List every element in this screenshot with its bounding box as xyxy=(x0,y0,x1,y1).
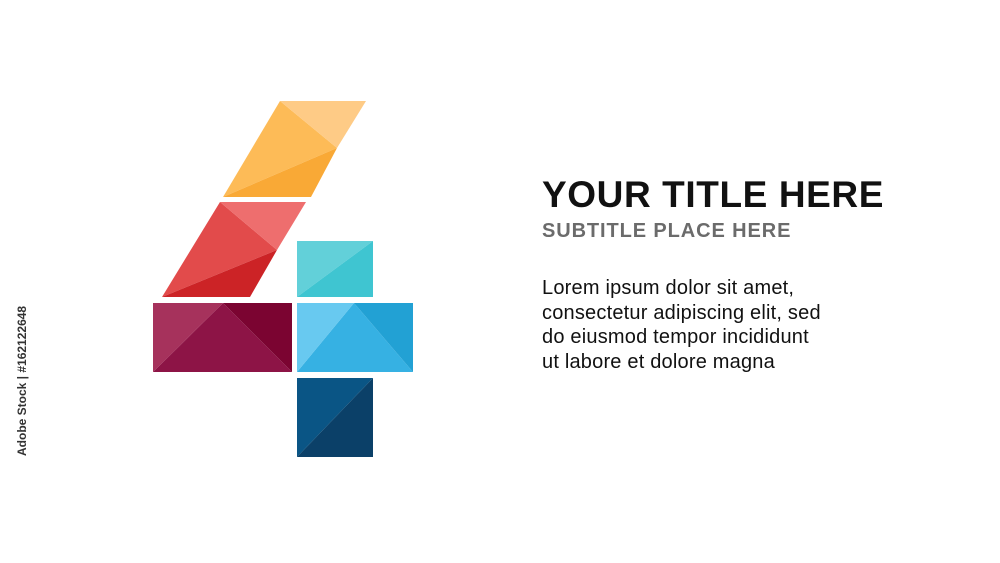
watermark side text: Adobe Stock | #162122648 xyxy=(15,306,29,456)
body text: do eiusmod tempor incididunt xyxy=(542,326,809,348)
red parallelogram xyxy=(162,202,306,297)
blue block xyxy=(297,303,413,372)
body text: consectetur adipiscing elit, sed xyxy=(542,302,821,324)
teal block xyxy=(297,241,373,297)
body text: ut labore et dolore magna xyxy=(542,350,775,372)
title: YOUR TITLE HERE xyxy=(542,174,884,215)
maroon block xyxy=(153,303,292,372)
body text xyxy=(542,277,821,372)
body text: Lorem ipsum dolor sit amet, xyxy=(542,277,794,299)
orange parallelogram xyxy=(223,101,366,197)
navy block xyxy=(297,378,373,457)
subtitle: SUBTITLE PLACE HERE xyxy=(542,220,791,242)
